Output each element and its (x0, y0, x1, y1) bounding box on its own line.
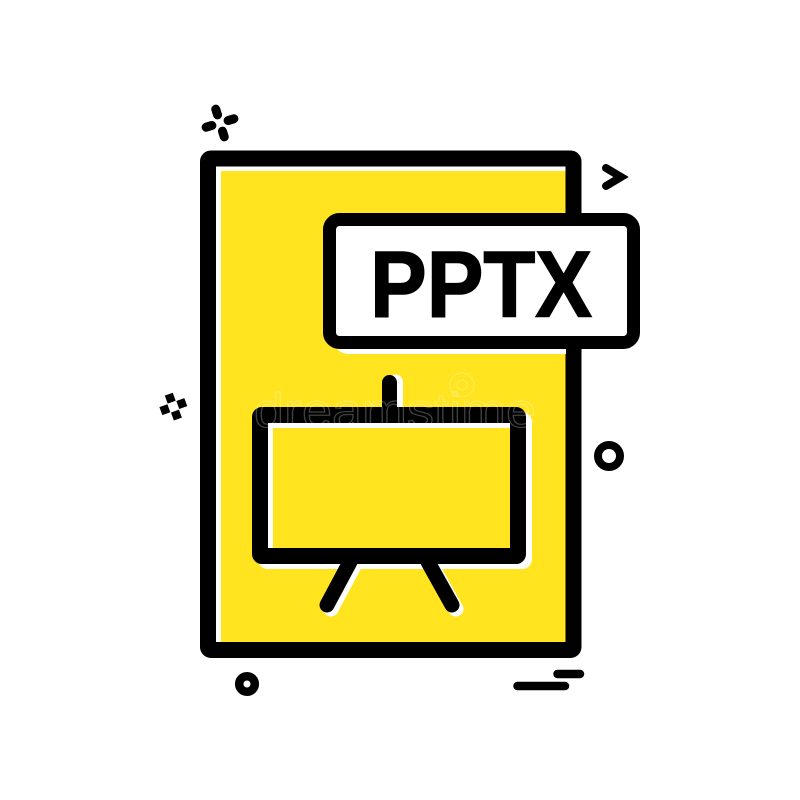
watermark: dreamstime (254, 385, 536, 438)
label text: PPTX (370, 231, 592, 336)
icon: speed lines (518, 674, 580, 686)
document panel (208, 158, 574, 650)
board inner yellow (273, 428, 510, 548)
icon: sparkle star (202, 105, 238, 141)
easel legs and pole (327, 382, 452, 605)
board frame (260, 415, 518, 556)
board white offset shadow (266, 382, 524, 609)
label box (330, 220, 634, 342)
label white shadow (337, 348, 566, 354)
icon: chevron (606, 168, 621, 186)
PPTX label (330, 220, 634, 354)
infographic: PPTX file icon (159, 104, 640, 696)
icon: diamond squares (156, 390, 190, 424)
icon: ring bottom (239, 676, 255, 692)
presentation board icon (260, 382, 524, 609)
icon: ring right (598, 445, 620, 467)
